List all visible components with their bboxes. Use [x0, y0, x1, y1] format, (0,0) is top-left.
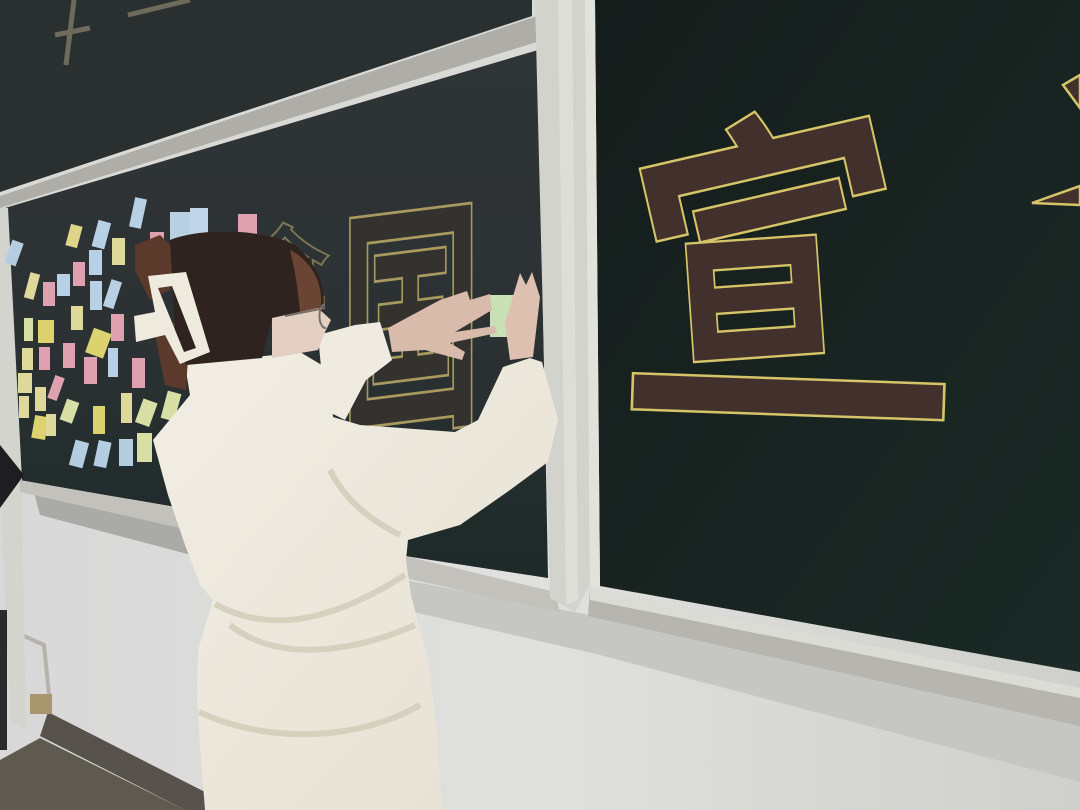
lower left frame rail [20, 480, 560, 612]
hair [170, 232, 324, 365]
pipe on wall [22, 635, 52, 714]
chalk character on right board: 宣: 宣 [610, 85, 975, 471]
woman [134, 232, 558, 810]
chalk character on right board: 宣: 宣 [610, 67, 962, 493]
upper left blackboard [0, 0, 532, 192]
faint chalk character behind hair: 全 [240, 220, 330, 320]
wall shadow under left frame [34, 492, 210, 560]
floor and skirting [0, 712, 205, 810]
hair bun and lower hair [135, 235, 190, 390]
vertical metal frame [535, 0, 600, 612]
sticky notes [4, 197, 514, 468]
right blackboard [595, 0, 1080, 672]
glasses [285, 304, 326, 328]
far arm sleeve [318, 322, 392, 420]
jacket body [153, 352, 558, 810]
face [272, 308, 331, 358]
hair claw clip [134, 272, 210, 364]
chalk character on right board: 宣: 宣 [628, 90, 880, 462]
lower left blackboard [5, 50, 548, 578]
person at left edge [0, 445, 24, 750]
faded chalk characters on upper board [55, 0, 190, 65]
upper frame rail [0, 16, 537, 208]
wall shadow under right frame [405, 580, 1080, 782]
hand right [505, 272, 540, 360]
jacket shadow folds [199, 470, 420, 734]
partial chalk character at right edge [1032, 75, 1080, 205]
chalk character on right board: 宣 [630, 110, 946, 422]
left frame edge [0, 208, 26, 730]
chalk character on lower board: 国: 国 [339, 179, 483, 474]
right bottom frame rail [588, 588, 1080, 726]
wall [0, 470, 1080, 810]
hand left [388, 291, 497, 360]
